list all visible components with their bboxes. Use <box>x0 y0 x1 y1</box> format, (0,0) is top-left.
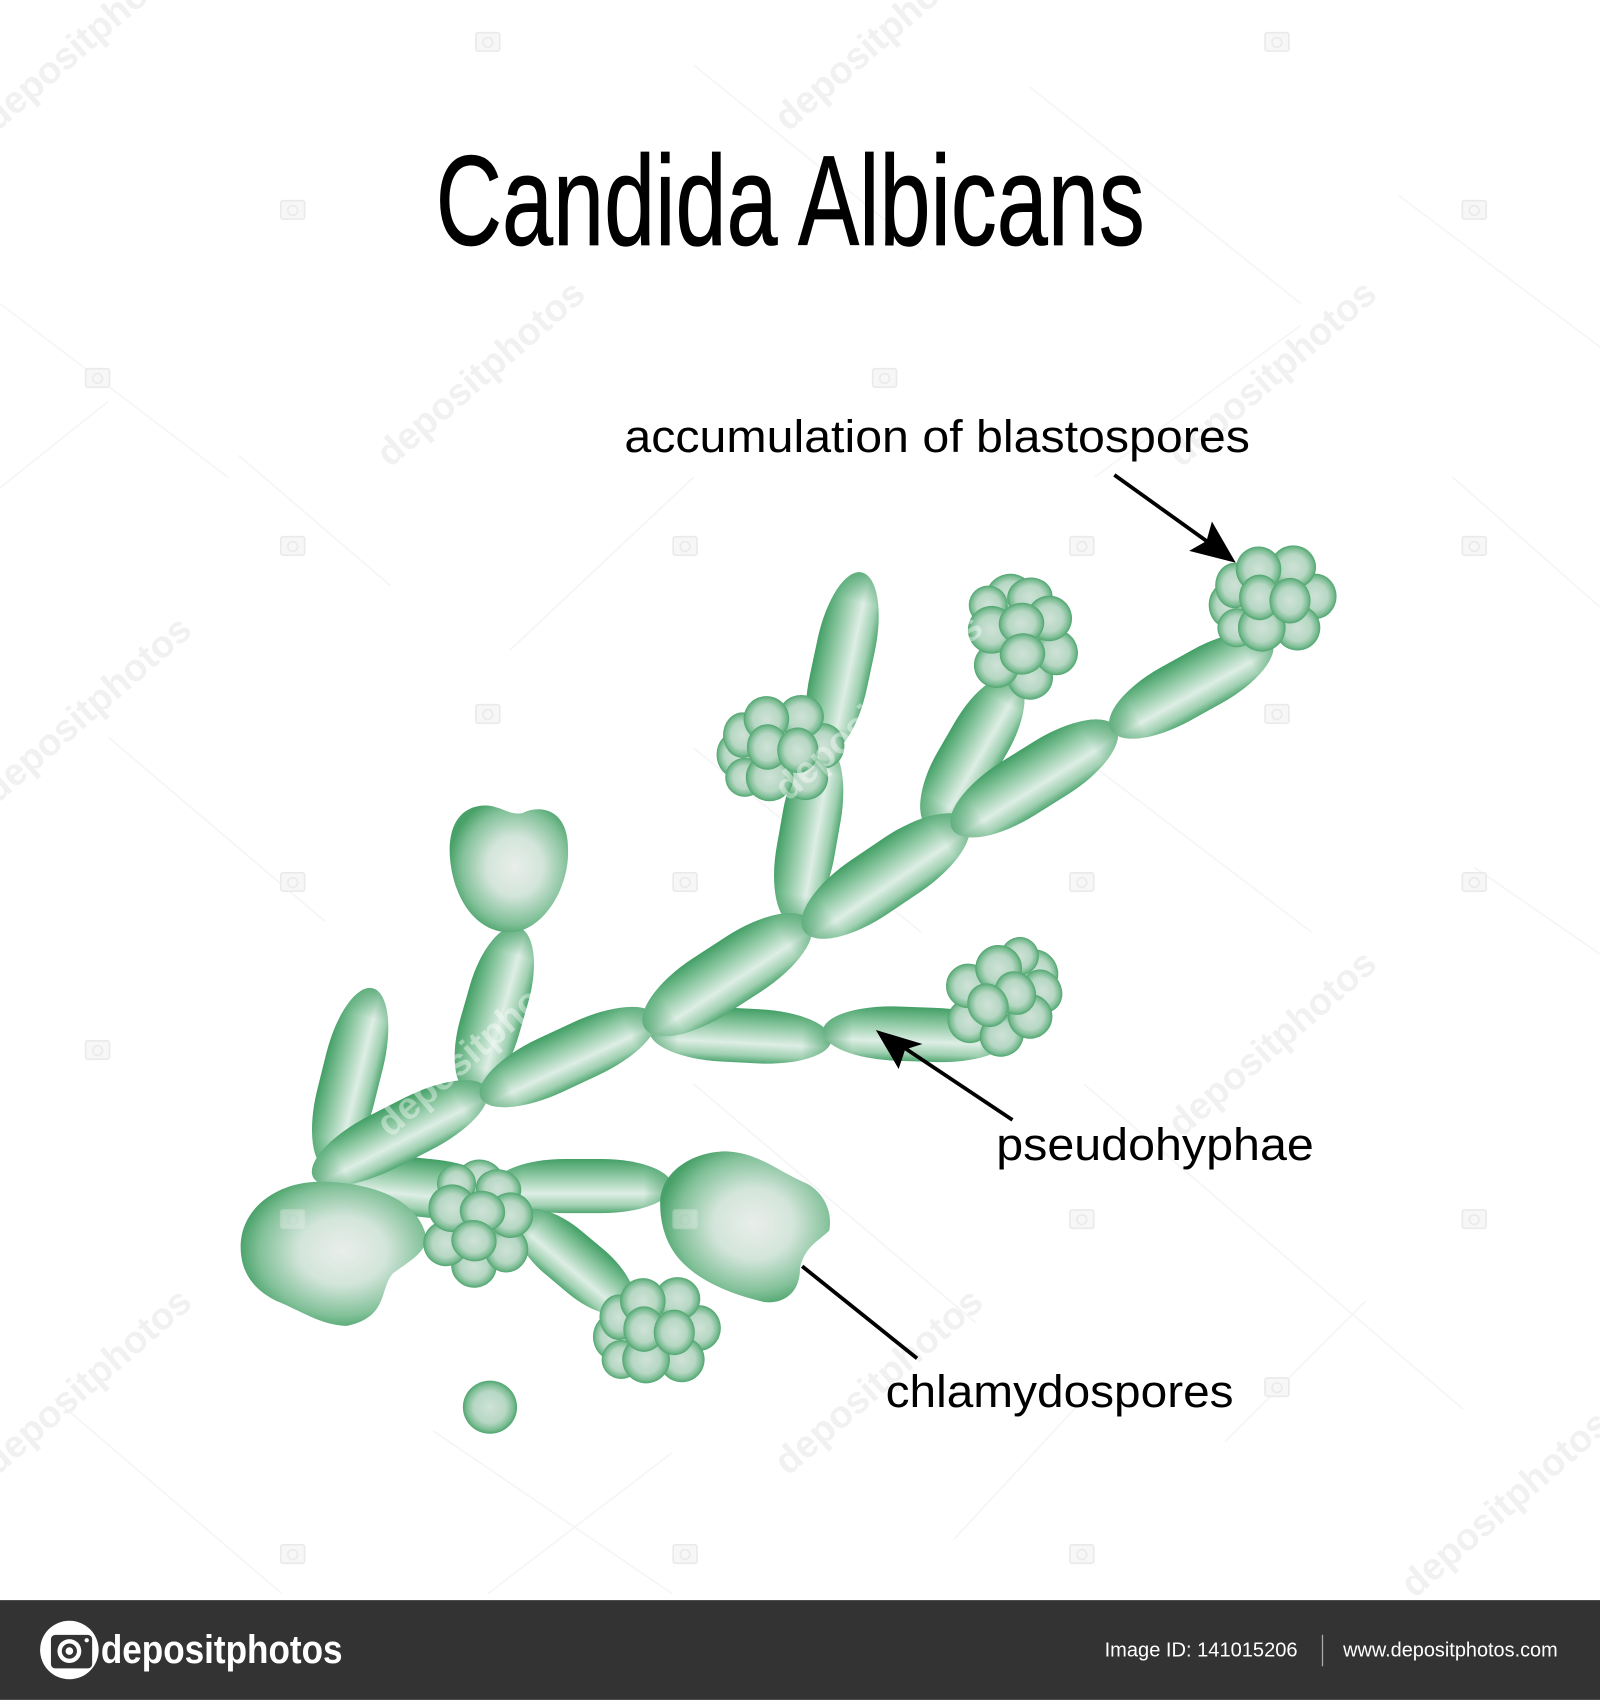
cell: stalk under top-tooth chlamydospore <box>441 919 547 1102</box>
cell: long upper branch base <box>764 739 853 928</box>
chlamydospore: right large <box>660 1151 830 1302</box>
blastospore cluster: top right <box>1209 545 1337 652</box>
cell: main hypha 2 <box>936 701 1133 856</box>
chlamydospore: left large <box>241 1182 426 1326</box>
blastospore cluster: upper branch <box>717 695 844 801</box>
pointer line: to chlamydospores <box>802 1266 917 1358</box>
blastospore cluster: right side branch <box>923 922 1084 1075</box>
cell: main hypha 5 <box>468 990 668 1124</box>
single spore <box>463 1381 517 1434</box>
watermark over the organism: depositphotos <box>369 942 593 1145</box>
chlamydospore: top <box>450 805 568 932</box>
footer logo text: depositphotos <box>101 1628 343 1672</box>
cell: long upper branch tip <box>794 566 890 761</box>
label: accumulation of blastospores: accumulation of blastospores <box>624 411 1250 462</box>
label: pseudohyphae: pseudohyphae <box>996 1119 1314 1170</box>
cell: left upright branch <box>299 981 401 1176</box>
cell: lower branch left <box>330 1149 504 1225</box>
website url: www.depositphotos.com <box>1342 1640 1558 1662</box>
stock watermark pattern: depositphotos <box>766 1280 991 1483</box>
image id: Image ID: 141015206 <box>1105 1640 1298 1662</box>
label: chlamydospores: chlamydospores <box>886 1366 1234 1417</box>
diagram: Candida albicans organism <box>241 545 1337 1434</box>
footer bar <box>0 1600 1600 1700</box>
cell: main hypha 6 <box>300 1063 500 1203</box>
cell: main hypha 3 <box>786 794 986 958</box>
blastospore cluster: bottom <box>593 1277 721 1383</box>
cell: middle upper branch <box>903 662 1042 843</box>
stock watermark pattern: depositphotos <box>369 272 593 475</box>
cell: main hypha 1 <box>1096 614 1287 756</box>
icon: depositphotos camera logo <box>40 1621 99 1679</box>
stock watermark pattern: depositphotos <box>1160 272 1385 475</box>
blastospore cluster: top middle <box>961 566 1084 707</box>
cell: lower branch right <box>494 1159 672 1213</box>
title: Candida Albicans <box>436 130 1145 273</box>
stock watermark pattern: depositphotos <box>1160 942 1385 1145</box>
watermark over the organism <box>281 606 991 1228</box>
watermark over the organism: depositphotos <box>766 606 991 809</box>
arrow: to blastospores <box>1114 475 1236 563</box>
cell: lower branch diagonal <box>500 1193 649 1331</box>
cell: right side branch outer <box>822 1004 1010 1065</box>
cell: main hypha 4 <box>627 894 828 1056</box>
arrow: to pseudohyphae <box>876 1030 1012 1120</box>
blastospore cluster: centre bottom <box>416 1152 543 1296</box>
footer divider <box>1321 1635 1323 1666</box>
cell: right side branch inner <box>648 1004 833 1067</box>
